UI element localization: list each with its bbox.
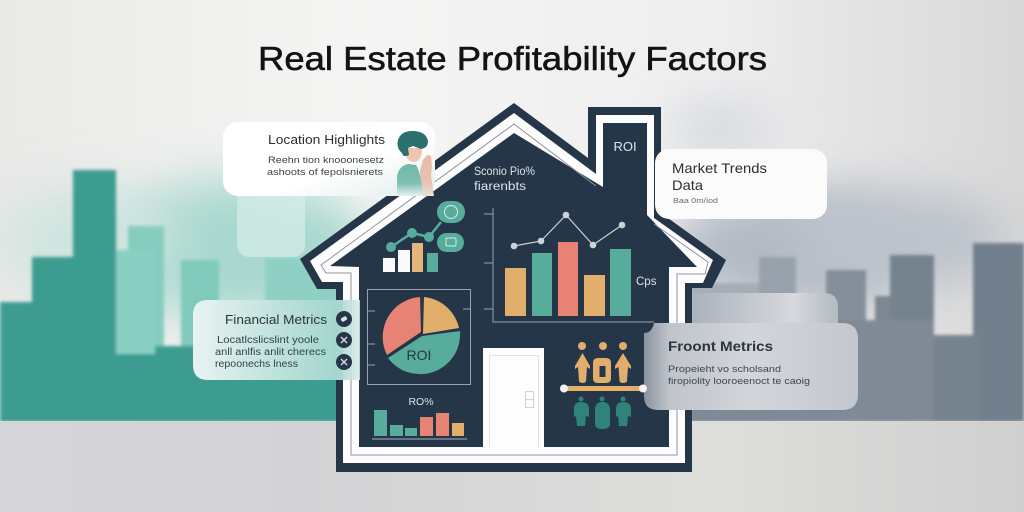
text: financial body: anll anlfis anlit cherecs <box>215 347 326 358</box>
people icon group <box>560 342 643 429</box>
text: financial body: repoonechs lness <box>215 359 298 370</box>
house illustration <box>300 103 726 472</box>
house: outer shell <box>300 103 726 472</box>
house heading <box>474 166 535 193</box>
heading: financial metrics: Financial Metrics <box>225 313 327 327</box>
heading: front metrics: Froont Metrics <box>668 339 773 354</box>
faded panel behind location card <box>237 180 305 257</box>
heading: market trends: Market Trends <box>672 160 767 176</box>
heading: market trends: Data <box>672 177 703 193</box>
bar and line chart <box>484 208 654 322</box>
skyline: grey city right <box>690 243 1024 423</box>
text: market body: Baa 0m/iod <box>673 198 718 205</box>
text: location body: ashoots of fepolsnierets <box>267 167 383 178</box>
skyline: teal city left <box>0 170 340 422</box>
icon: person <box>397 131 434 196</box>
house heading: fiarenbts <box>474 181 526 193</box>
house: inner panel <box>330 123 697 447</box>
card: back panel <box>692 293 838 323</box>
icon: dots <box>336 311 352 370</box>
door <box>483 348 544 447</box>
text: front body: firopiolity looroeenoct te caoig <box>668 376 810 387</box>
chart label: Cps <box>636 276 657 288</box>
pie chart: ROI <box>407 347 431 363</box>
small chart with icons <box>383 201 465 272</box>
card: financial metrics <box>193 300 360 380</box>
text: financial body <box>215 335 326 370</box>
pie chart <box>367 290 471 384</box>
card: market trends <box>655 149 827 219</box>
mini bar chart <box>372 410 467 440</box>
text: location body <box>267 155 384 178</box>
card: location highlights <box>223 122 435 196</box>
house heading: Sconio Pio% <box>474 166 535 178</box>
mini chart label: RO% <box>408 396 434 408</box>
heading: location highlights: Location Highlights <box>268 132 386 147</box>
floor <box>0 421 1024 512</box>
chimney label: ROI <box>613 139 637 154</box>
text: front body: Propeieht vo scholsand <box>668 364 781 375</box>
people bar end dot <box>639 384 647 392</box>
house: white band <box>310 113 713 463</box>
text: financial body: Locatlcslicslint yoole <box>217 335 319 346</box>
text: front body <box>668 364 810 387</box>
text: location body: Reehn tion knooonesetz <box>268 155 384 166</box>
title: Real Estate Profitability Factors <box>258 40 767 77</box>
card: front metrics <box>644 323 858 410</box>
heading: market trends <box>672 160 767 193</box>
